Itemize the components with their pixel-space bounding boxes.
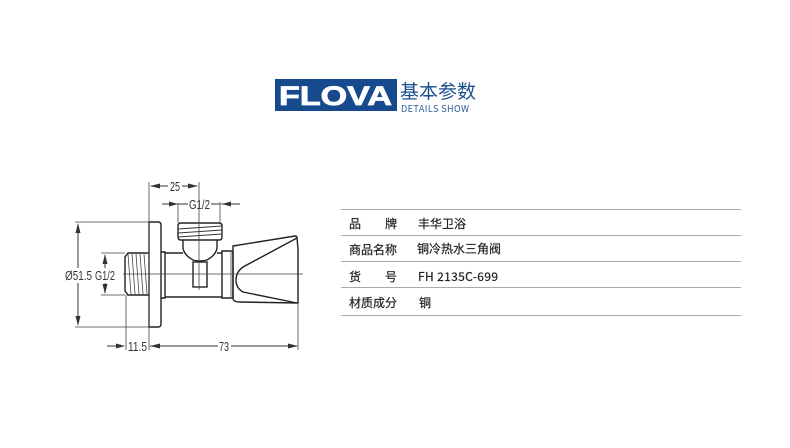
row: material: 材质成分 bbox=[349, 294, 397, 311]
dimension: diameter 51.5: Ø51.5 bbox=[65, 268, 92, 283]
handle bbox=[233, 236, 298, 303]
specification table bbox=[341, 210, 741, 316]
row: brand: 丰华卫浴 bbox=[418, 215, 466, 232]
dimension: 73 bbox=[150, 339, 298, 354]
row: model number bbox=[349, 268, 498, 285]
header logo and title bbox=[275, 77, 476, 115]
row: material: 铜 bbox=[419, 294, 431, 311]
row: model number: FH 2135C-699 bbox=[418, 268, 498, 285]
dimension: G1/2 inlet bbox=[95, 254, 115, 294]
dimension: G1/2 inlet: G1/2 bbox=[95, 268, 115, 283]
row: product name: 铜冷热水三角阀 bbox=[417, 240, 501, 257]
dimension: 25: 25 bbox=[170, 179, 180, 194]
row: brand: 品 bbox=[349, 215, 361, 232]
row: model number: 货 bbox=[349, 268, 361, 285]
logo: FLOVA bbox=[275, 79, 397, 111]
dimension: G1/2 outlet bbox=[162, 197, 240, 212]
flange bbox=[149, 222, 161, 327]
row: material bbox=[349, 294, 431, 311]
row: product name: 商品名称 bbox=[349, 241, 397, 258]
valve body bbox=[161, 251, 233, 298]
heading: 基本参数: 基本参数 bbox=[400, 77, 476, 104]
centre lines bbox=[123, 182, 303, 290]
technical drawing: angle valve bbox=[65, 179, 303, 354]
row: brand: 牌 bbox=[385, 215, 397, 232]
logo: FLOVA: FLOVA bbox=[279, 81, 392, 111]
top outlet nut bbox=[178, 223, 222, 287]
dimension: 11.5: 11.5 bbox=[128, 339, 147, 354]
dimension: G1/2 outlet: G1/2 bbox=[189, 197, 210, 212]
threaded inlet bbox=[125, 253, 149, 295]
extension lines bbox=[75, 182, 298, 350]
subheading: DETAILS SHOW: DETAILS SHOW bbox=[401, 102, 469, 115]
row: model number: 号 bbox=[385, 268, 397, 285]
dimension: 25 bbox=[150, 179, 198, 194]
dimension: 11.5 bbox=[107, 339, 147, 354]
dimension: 73: 73 bbox=[219, 339, 229, 354]
row: brand bbox=[349, 215, 466, 232]
row: product name bbox=[349, 240, 501, 258]
dimension: diameter 51.5 bbox=[65, 223, 92, 326]
